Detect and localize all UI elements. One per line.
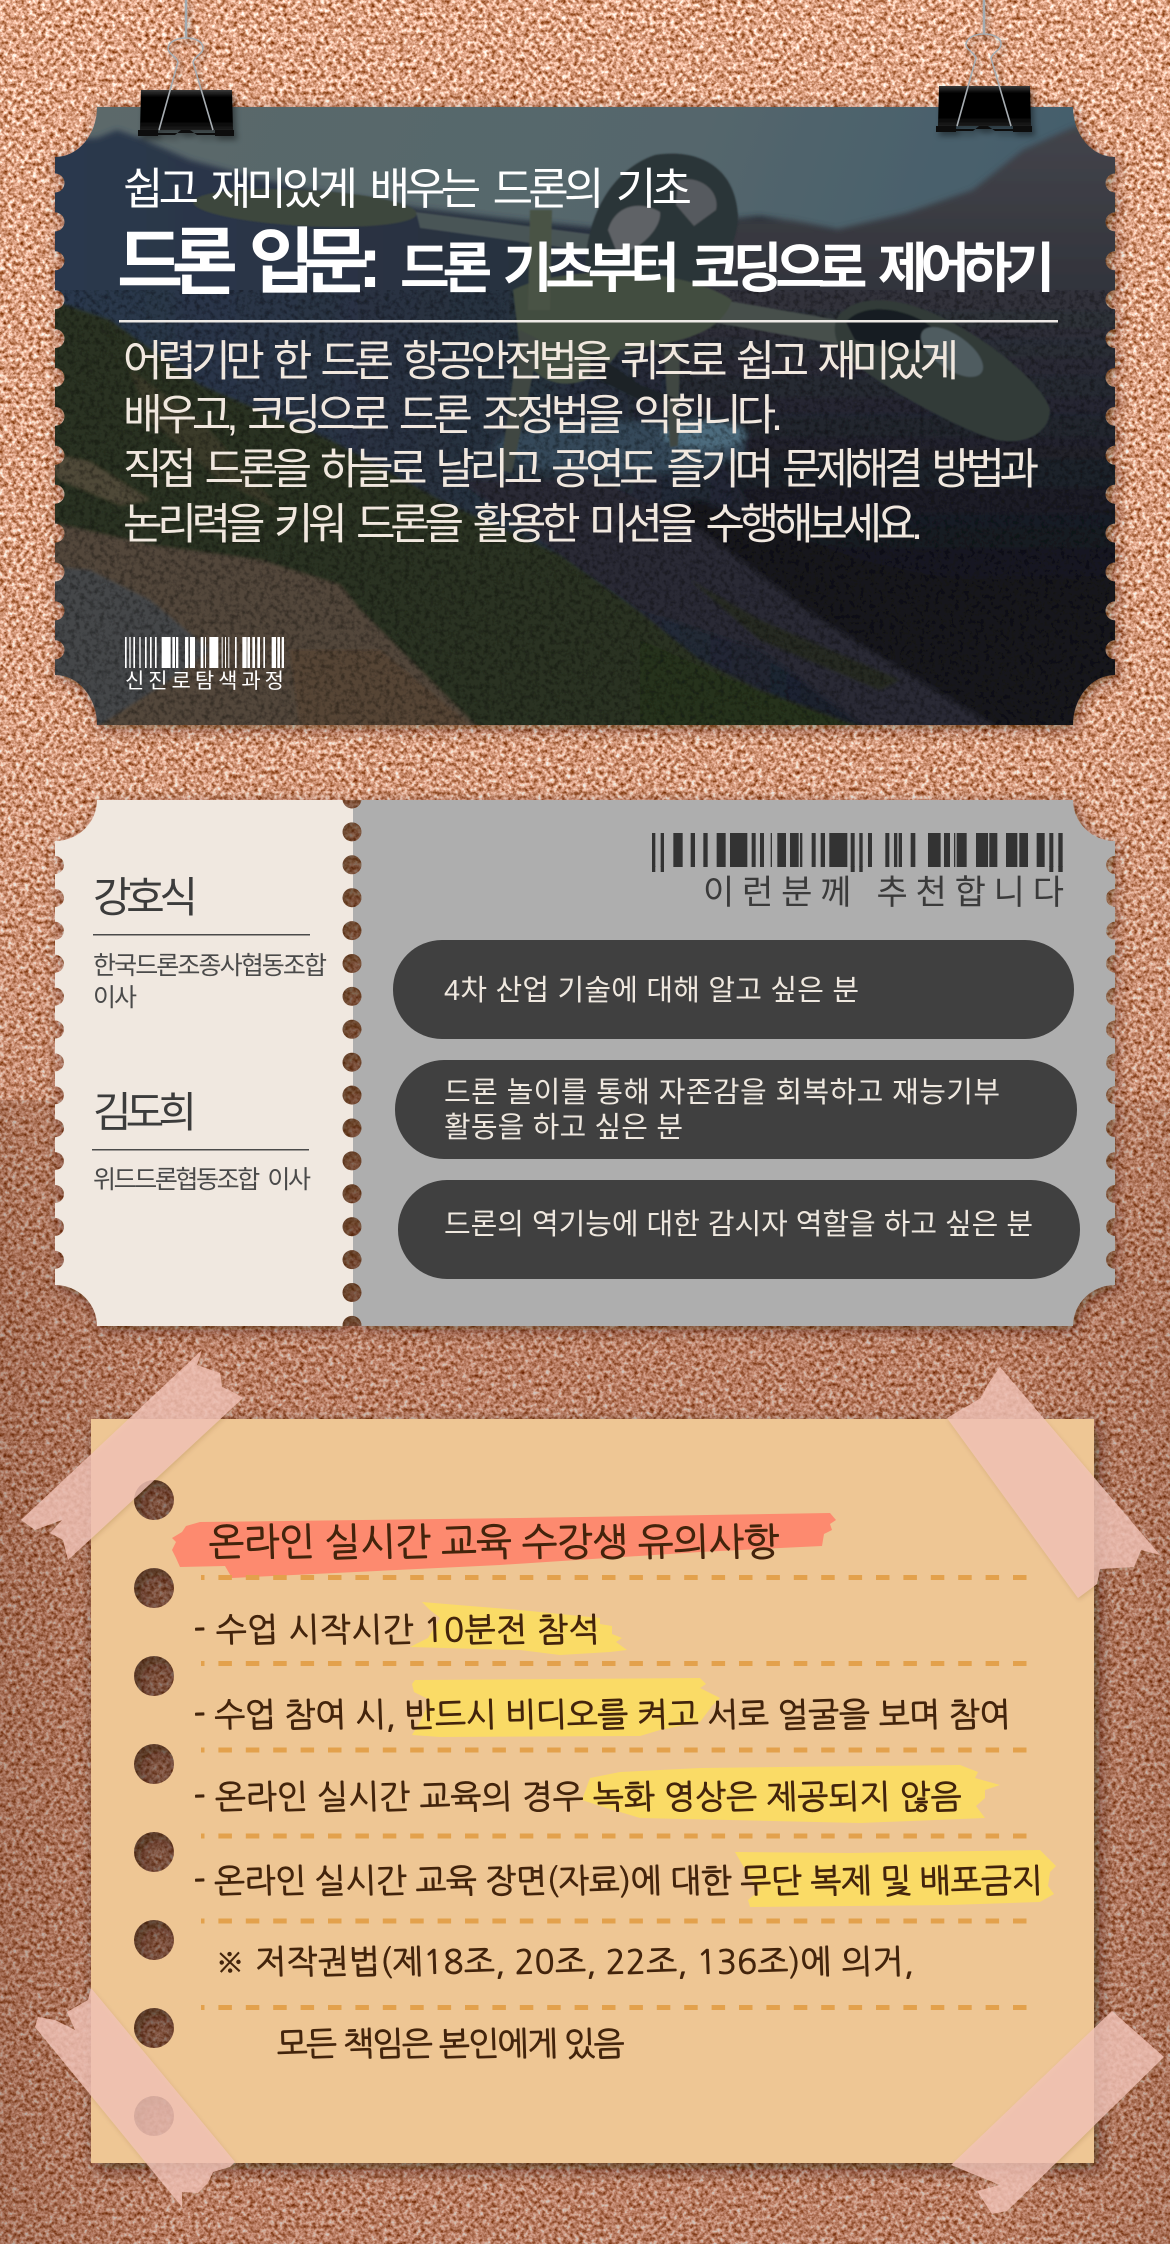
notice item 3: - 온라인 실시간 교육의 경우 녹화 영상은 제공되지 않음 <box>193 1780 962 1814</box>
barcode label: 신진로탐색과정: 신진로탐색과정 <box>125 670 284 693</box>
title: main: 드론 입문: <box>117 223 382 303</box>
stub: instructor 강호식 <box>93 874 327 1012</box>
description <box>123 338 1039 549</box>
description: 배우고, 코딩으로 드론 조정법을 익힙니다. <box>123 392 783 440</box>
stub: instructor 강호식: 이사 <box>93 984 137 1012</box>
tape: bottom left <box>35 1988 235 2207</box>
pill: recommendation 2 <box>395 1060 1077 1159</box>
copyright note line 2: 모든 책임은 본인에게 있음 <box>276 2027 625 2061</box>
pill: recommendation 3 <box>398 1180 1080 1279</box>
description: 논리력을 키워 드론을 활용한 미션을 수행해보세요. <box>123 501 923 549</box>
stub: instructor 강호식: 한국드론조종사협동조합 <box>93 952 327 980</box>
perforation holes <box>342 799 362 1330</box>
yellow highlight 4 <box>735 1850 1056 1907</box>
paper sheet <box>91 1419 1094 2163</box>
description: 직접 드론을 하늘로 날리고 공연도 즐기며 문제해결 방법과 <box>123 446 1039 494</box>
heading brush highlight <box>172 1513 836 1578</box>
copyright note: ※ 저작권법(제18조, 20조, 22조, 136조)에 의거, <box>214 1945 914 1979</box>
stub: instructor 김도희: 김도희 <box>93 1089 197 1136</box>
notice item 2: - 수업 참여 시, 반드시 비디오를 켜고 서로 얼굴을 보며 참여 <box>193 1698 1011 1732</box>
notice item 4: - 온라인 실시간 교육 장면(자료)에 대한 무단 복제 및 배포금지 <box>193 1864 1043 1898</box>
subtitle: 쉽고 재미있게 배우는 드론의 기초 <box>123 165 692 214</box>
panel: course ticket <box>40 107 1130 740</box>
yellow highlight 3 <box>582 1765 1000 1823</box>
tape: bottom right <box>951 2011 1164 2214</box>
yellow highlight 1 <box>410 1602 627 1655</box>
pill: recommendation 2: 드론 놀이를 통해 자존감을 회복하고 재능기부 <box>444 1076 1000 1109</box>
ticket body with perforation <box>55 800 1115 1326</box>
description: 어렵기만 한 드론 항공안전법을 퀴즈로 쉽고 재미있게 <box>123 338 959 386</box>
dashed rules <box>201 1578 1034 2008</box>
yellow highlight 2 <box>412 1678 720 1737</box>
barcode heading <box>652 850 1064 912</box>
punched holes <box>134 1500 174 2120</box>
title: secondary: 드론 기초부터 코딩으로 제어하기 <box>400 239 1055 299</box>
barcode heading: 이런분께 추천합니다 <box>703 874 1064 912</box>
divider line <box>119 320 1058 322</box>
pill: recommendation 3: 드론의 역기능에 대한 감시자 역할을 하고 싶은 분 <box>444 1208 1033 1241</box>
ticket photo: drone over mountains <box>40 107 1130 740</box>
pill: recommendation 1 <box>393 940 1074 1039</box>
icon: left binder clip <box>138 0 234 136</box>
panel: instructors and recommendation ticket <box>55 799 1115 1330</box>
panel: notice paper <box>21 1350 1164 2214</box>
notice item 1: - 수업 시작시간 10분전 참석 <box>193 1613 600 1647</box>
pill: recommendation 2: 활동을 하고 싶은 분 <box>444 1111 683 1144</box>
stub: instructor 강호식: 강호식 <box>93 874 198 921</box>
notice heading: 온라인 실시간 교육 수강생 유의사항 <box>208 1523 780 1562</box>
icon: right binder clip <box>936 0 1032 132</box>
stub: instructor 김도희 <box>92 1089 311 1194</box>
pill: recommendation 1: 4차 산업 기술에 대해 알고 싶은 분 <box>444 974 859 1007</box>
stub: instructor 김도희: 위드드론협동조합 이사 <box>93 1166 311 1194</box>
tape: top left <box>21 1350 243 1560</box>
tape: top right <box>947 1367 1160 1598</box>
